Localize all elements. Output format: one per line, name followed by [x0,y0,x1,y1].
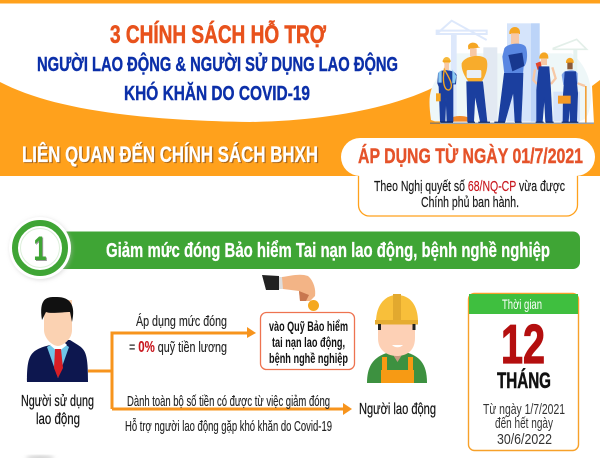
panel: duration: THÁNG [497,368,551,393]
number badge 1 [9,217,72,280]
employer label: lao động [36,411,80,428]
title: 3 CHÍNH SÁCH HỖ TRỢ [110,19,327,49]
panel: duration: Từ ngày 1/7/2021 [483,401,565,418]
section 1 heading bar [50,232,580,269]
callout: effective date [341,138,595,216]
panel: duration: 30/6/2022 [497,431,552,448]
band heading: LIÊN QUAN ĐẾN CHÍNH SÁCH BHXH [22,142,318,167]
worker 4 [533,52,556,123]
title: KHÓ KHĂN DO COVID-19 [124,81,310,105]
panel: duration: 12 [501,313,545,375]
arrows: flow from employer [88,327,352,415]
illustration: construction workers [429,21,594,124]
callout: effective date: Theo Nghị quyết số 68/NQ-CP vừa được [374,178,565,195]
text: support: Hỗ trợ người lao động gặp khó khăn do Covid-19 [125,418,332,435]
number badge 1: 1 [34,230,46,268]
text: rate: = 0% quỹ tiền lương [129,339,227,356]
title [37,19,398,105]
employer label: Người sử dụng [21,393,94,410]
text: support: Dành toàn bộ số tiền có được từ việc giảm đóng [127,394,330,410]
number badge 1: 1 [34,231,48,269]
text: support [125,394,332,435]
callout: insurance fund: tai nạn lao động, [272,335,345,350]
text: rate: Áp dụng mức đóng [136,313,227,330]
icon: hand dropping coin [262,275,319,311]
panel: duration [468,294,578,450]
employer label [21,393,94,428]
callout: effective date: Chính phủ ban hành. [421,194,519,211]
worker 5 [558,58,587,123]
worker label: Người lao động [359,401,436,418]
worker 2 [462,43,490,123]
callout: insurance fund [260,312,354,370]
icon: employer [27,297,88,382]
text: rate [129,313,227,356]
title: NGƯỜI LAO ĐỘNG & NGƯỜI SỬ DỤNG LAO ĐỘNG [37,52,398,76]
panel: duration: đến hết ngày [495,415,553,432]
worker 3 [494,27,527,123]
callout: insurance fund: bệnh nghề nghiệp [269,351,348,366]
callout: insurance fund: vào Quỹ Bảo hiểm [269,319,348,334]
icon: worker [367,294,427,383]
panel: duration: Thời gian [502,296,542,312]
worker 1 [436,57,456,123]
band heading: LIÊN QUAN ĐẾN CHÍNH SÁCH BHXH [23,143,319,168]
